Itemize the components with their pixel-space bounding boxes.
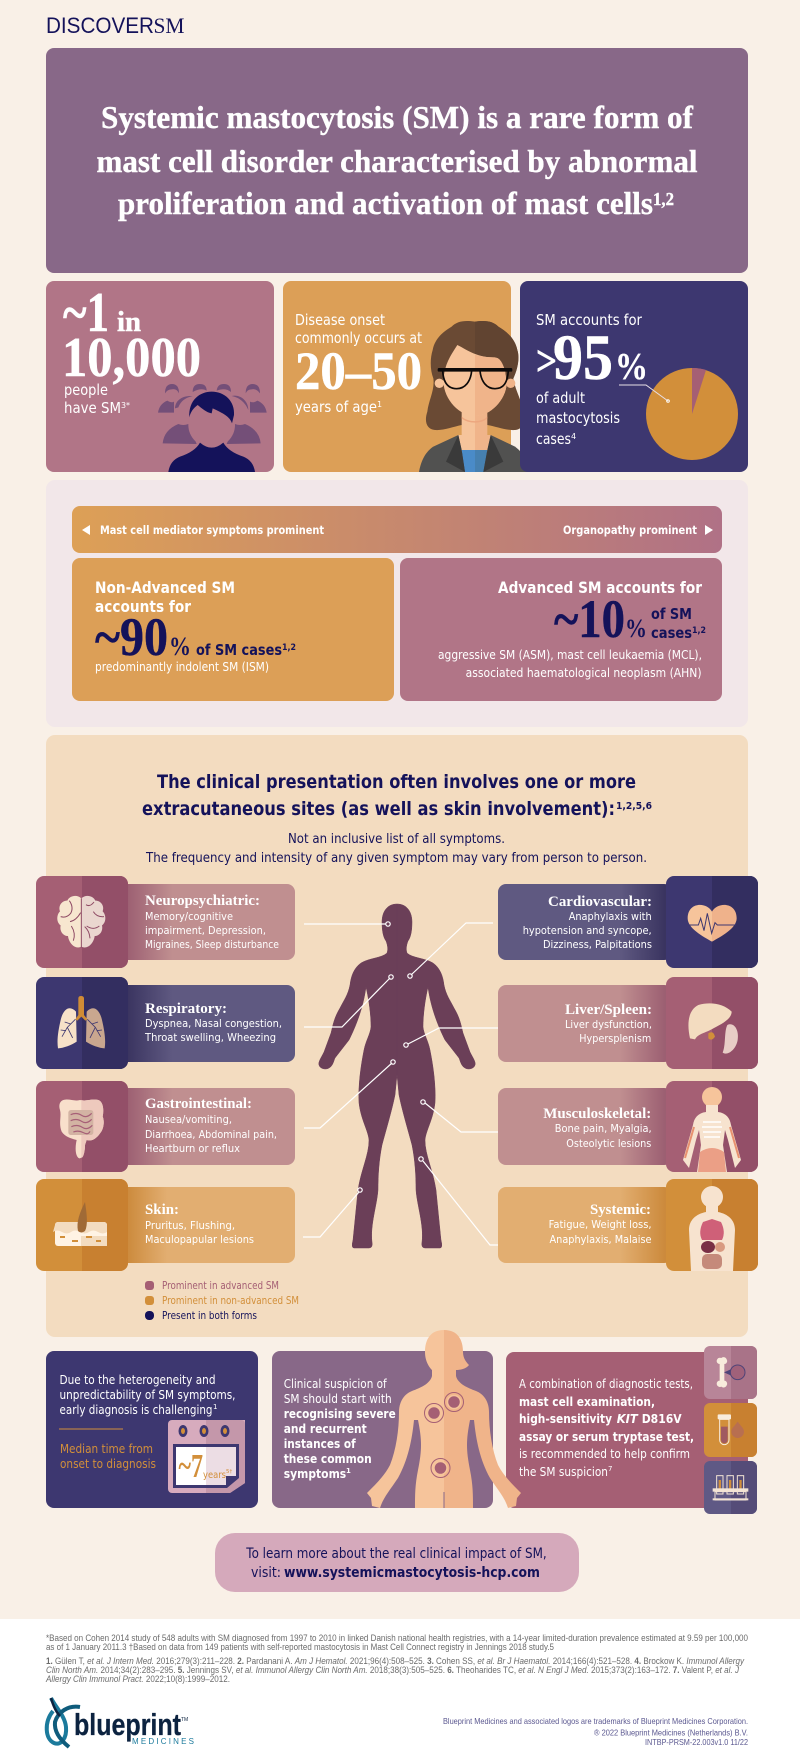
icon: blood sample tube [704, 1403, 757, 1457]
panel: SM subtypes [46, 480, 748, 727]
text: respiratory symptoms: Dyspnea, Nasal congestion, [145, 1017, 282, 1030]
text: >95% of adult mastocytosis cases: 4 [571, 432, 576, 441]
text: gastrointestinal symptoms: Gastrointestinal: [145, 1096, 252, 1112]
text: disease onset: Disease onset [295, 311, 385, 329]
panel: disease onset stat card [283, 281, 529, 472]
legend: Present in both forms [162, 1310, 257, 1322]
card: non-advanced SM: of SM cases [196, 641, 282, 659]
symptom panel: gastrointestinal [36, 1081, 295, 1172]
text: disease onset: 1 [377, 400, 382, 409]
logo: Blueprint Medicines: blueprint [74, 1707, 181, 1742]
icon: figure with internal organs [689, 1186, 735, 1271]
text: disclaimer: The frequency and intensity of any given symptom may vary from person to person. [145, 851, 647, 866]
symptom panel: skin [36, 1179, 295, 1271]
text: cardiovascular symptoms: hypotension and syncope, [523, 924, 652, 937]
footnotes and references [45, 1633, 748, 1684]
text: early diagnosis is challenging: unpredictability of SM symptoms, [60, 1387, 236, 1402]
icon: heart with ECG [688, 905, 737, 942]
text: systemic symptoms: Anaphylaxis, Malaise [550, 1233, 652, 1246]
logo: Blueprint Medicines: TM [181, 1717, 188, 1723]
text: neuropsychiatric symptoms: Migraines, Sleep disturbance [145, 938, 279, 951]
text: median time from onset to diagnosis: Median time from [60, 1441, 153, 1456]
panel: SM share stat card [520, 281, 748, 472]
icon: brain [57, 896, 105, 948]
icon: lungs [58, 996, 105, 1048]
heading: clinical presentation: The clinical presentation often involves one or more [157, 771, 636, 793]
text: liver and spleen symptoms: Liver/Spleen: [565, 1002, 652, 1018]
card: non-advanced SM [72, 558, 394, 701]
text: >95% of adult mastocytosis cases: SM accounts for [536, 311, 643, 329]
legend [145, 1280, 299, 1322]
text: diagnostic tests: is recommended to help confirm [519, 1446, 690, 1461]
legal text: ® 2022 Blueprint Medicines (Netherlands) B.V. [594, 1728, 748, 1738]
panel: diagnostic challenge [46, 1351, 258, 1508]
symptom panel: musculoskeletal [498, 1081, 758, 1172]
text: clinical suspicion: Clinical suspicion of [284, 1376, 387, 1391]
text: early diagnosis is challenging: Due to the heterogeneity and [60, 1372, 216, 1387]
text: clinical suspicion: 1 [346, 1467, 351, 1475]
label: people have SM: have SM [64, 399, 121, 417]
heading: definition of systemic mastocytosis: mast cell disorder characterised by abnormal [96, 143, 698, 179]
text: median time from onset to diagnosis [60, 1441, 156, 1471]
card: non-advanced SM: accounts for [95, 597, 191, 616]
card: advanced SM: ~10 [554, 589, 625, 649]
text: respiratory symptoms: Respiratory: [145, 1001, 227, 1017]
text: disease onset [295, 311, 422, 416]
card: advanced SM: aggressive SM (ASM), mast cell leukaemia (MCL), [438, 648, 702, 662]
icon: calendar showing ~7 years: years [203, 1470, 226, 1481]
text: diagnostic tests: the SM suspicion [519, 1464, 608, 1479]
text: >95% of adult mastocytosis cases: > [536, 339, 557, 385]
text: neuropsychiatric symptoms [145, 893, 279, 951]
text: systemic symptoms [549, 1202, 652, 1246]
text: >95% of adult mastocytosis cases: % [615, 346, 648, 388]
card: non-advanced SM: ~90 [95, 607, 168, 667]
icon: woman with glasses [419, 321, 529, 472]
text: systemic symptoms: Fatigue, Weight loss, [549, 1218, 652, 1231]
text: musculoskeletal symptoms [543, 1106, 652, 1150]
card: advanced SM: 1,2 [692, 626, 706, 636]
panel: clinical presentation [36, 735, 758, 1337]
card: non-advanced SM: predominantly indolent SM (ISM) [95, 660, 269, 674]
symptom panel: systemic [498, 1179, 758, 1271]
text: respiratory symptoms [144, 1001, 282, 1044]
logo: DISCOVERSM: DISCOVER [46, 13, 154, 38]
text: >95% of adult mastocytosis cases: of adult [536, 389, 585, 407]
text: cardiovascular symptoms: Anaphylaxis with [569, 910, 652, 923]
card: advanced SM: associated haematological neoplasm (AHN) [466, 666, 702, 680]
stat: ~1 in 10,000: in [117, 306, 141, 338]
text: gastrointestinal symptoms: Nausea/vomiting, [145, 1113, 232, 1126]
footnotes and references: Clin North Am. 2014;34(2):283–295. 5. Jennings SV, et al. Immunol Allergy Clin North Am. 2018;38(3):505–525. 6. Theoharides TC, et al. N Engl J Med. 2015;373(2):163–172. 7. Valent P, et al. J [46, 1665, 740, 1675]
legend: Prominent in advanced SM [162, 1280, 279, 1292]
text: >95% of adult mastocytosis cases [536, 311, 648, 448]
text: clinical suspicion: symptoms [284, 1466, 346, 1481]
text: liver and spleen symptoms: Liver dysfunction, [565, 1018, 652, 1031]
card: advanced SM: Advanced SM accounts for [498, 578, 702, 597]
text: early diagnosis is challenging [60, 1372, 236, 1417]
callout: website link: To learn more about the real clinical impact of SM, [245, 1546, 547, 1562]
heading: clinical presentation [142, 771, 652, 820]
text: gastrointestinal symptoms: Diarrhoea, Abdominal pain, [145, 1128, 277, 1141]
panel: clinical suspicion [272, 1351, 493, 1508]
text: musculoskeletal symptoms: Musculoskeletal: [543, 1106, 651, 1122]
text: diagnostic tests: mast cell examination, [519, 1394, 655, 1409]
symptom panel: respiratory [36, 977, 295, 1069]
text: disease onset: 20–50 [295, 341, 422, 401]
stat: ~1 in 10,000: 10,000 [62, 327, 201, 389]
card: advanced SM [400, 558, 722, 701]
icon: bone marrow [704, 1346, 757, 1399]
symptom panel: neuropsychiatric [36, 876, 295, 968]
text: clinical suspicion: these common [284, 1451, 372, 1466]
text: musculoskeletal symptoms: Osteolytic lesions [566, 1137, 652, 1150]
footnotes and references: as of 1 January 2011.3 †Based on data from 149 patients with self-reported mastocytosis in Mast Cell Connect registry in Jennings 2018 study.5 [46, 1642, 554, 1652]
text: diagnostic tests: assay or serum tryptase test, [519, 1429, 694, 1444]
heading: clinical presentation: 1,2,5,6 [616, 801, 652, 812]
gradient bar: symptom spectrum: Mast cell mediator symptoms prominent [100, 523, 324, 537]
text: early diagnosis is challenging: early diagnosis is challenging [60, 1402, 212, 1417]
text: skin symptoms: Skin: [145, 1202, 179, 1218]
icon: calendar showing ~7 years [168, 1420, 245, 1493]
text: diagnostic tests: KIT [617, 1411, 639, 1426]
icon: skin layers with hair [53, 1202, 107, 1246]
text: >95% of adult mastocytosis cases: mastocytosis [536, 409, 620, 427]
text: diagnostic tests: D816V [642, 1411, 682, 1426]
label: people have SM: 3* [121, 401, 130, 410]
footnotes and references: *Based on Cohen 2014 study of 548 adults with SM diagnosed from 1997 to 2010 in linked Danish national health registries, with a 14-year limited-duration prevalence estimated at 9.59 per 100,000 [46, 1633, 748, 1643]
text: cardiovascular symptoms: Cardiovascular: [548, 894, 652, 910]
text: gastrointestinal symptoms [145, 1096, 277, 1155]
text: skin symptoms: Pruritus, Flushing, [145, 1219, 235, 1232]
card: non-advanced SM: 1,2 [282, 643, 296, 653]
stat: ~1 in 10,000 [62, 282, 201, 389]
card: advanced SM: of SM [651, 605, 692, 623]
text: neuropsychiatric symptoms: impairment, Depression, [145, 924, 266, 937]
text: neuropsychiatric symptoms: Neuropsychiatric: [145, 893, 260, 909]
text: neuropsychiatric symptoms: Memory/cognitive [145, 910, 233, 923]
text: >95% of adult mastocytosis cases: cases [536, 430, 571, 448]
callout: website link: www.systemicmastocytosis-hcp.com [284, 1565, 540, 1581]
text: clinical suspicion: SM should start with [284, 1391, 392, 1406]
gradient bar: symptom spectrum [72, 506, 722, 553]
text: diagnostic tests: high-sensitivity [519, 1411, 612, 1426]
legend: Prominent in non-advanced SM [162, 1295, 299, 1307]
legal text: Blueprint Medicines and associated logos are trademarks of Blueprint Medicines Corporation. [443, 1716, 748, 1726]
text: clinical suspicion [284, 1376, 396, 1481]
text: musculoskeletal symptoms: Bone pain, Myalgia, [555, 1122, 652, 1135]
panel: prevalence stat card [46, 281, 274, 472]
text: >95% of adult mastocytosis cases: 95 [553, 322, 613, 394]
label: people have SM: people [64, 381, 108, 399]
heading: clinical presentation: extracutaneous sites (as well as skin involvement): [142, 798, 615, 820]
heading: definition of systemic mastocytosis [96, 99, 698, 221]
gradient bar: symptom spectrum: Organopathy prominent [563, 523, 697, 537]
footnotes and references: Allergy Clin Immunol Pract. 2022;10(8):1999–2012. [45, 1674, 230, 1684]
text: early diagnosis is challenging: 1 [213, 1403, 217, 1411]
text: diagnostic tests: A combination of diagnostic tests, [519, 1376, 693, 1391]
heading: definition of systemic mastocytosis: proliferation and activation of mast cells [118, 185, 653, 221]
text: cardiovascular symptoms [523, 894, 652, 951]
text: clinical suspicion: and recurrent [284, 1421, 367, 1436]
text: disclaimer [145, 832, 647, 866]
stat: ~1 in 10,000: ~1 [63, 282, 109, 344]
text: liver and spleen symptoms: Hypersplenism [579, 1032, 651, 1045]
icon: helix [47, 1698, 80, 1747]
callout: website link [215, 1533, 579, 1592]
icon: calendar showing ~7 years: ~7 [178, 1448, 203, 1485]
text: liver and spleen symptoms [565, 1002, 652, 1045]
heading: definition of systemic mastocytosis: 1,2 [653, 189, 674, 209]
text: diagnostic tests [519, 1376, 694, 1479]
icon: crowd of people [158, 384, 267, 472]
card: non-advanced SM: % [169, 632, 191, 661]
text: skin symptoms: Maculopapular lesions [145, 1233, 254, 1246]
text: disease onset: years of age [295, 398, 377, 416]
footnotes and references: 1. Gülen T, et al. J Intern Med. 2016;279(3):211–228. 2. Pardanani A. Am J Hematol. 2021;96(4):508–525. 3. Cohen SS, et al. Br J Haematol. 2014;166(4):521–528. 4. Brockow K. Immunol Allergy [46, 1656, 745, 1666]
logo: DISCOVERSM: SM [154, 13, 184, 38]
text: clinical suspicion: instances of [284, 1436, 356, 1451]
connector lines from symptom panels to body [303, 922, 502, 1245]
card: non-advanced SM: Non-Advanced SM [95, 578, 235, 597]
text: skin symptoms [145, 1202, 254, 1246]
icon: liver and spleen [688, 1003, 738, 1054]
text: clinical suspicion: recognising severe [284, 1406, 396, 1421]
illustration: human body silhouette [319, 904, 475, 1248]
card: advanced SM: cases [651, 624, 692, 642]
card: advanced SM: % [625, 614, 647, 643]
text: median time from onset to diagnosis: onset to diagnosis [60, 1456, 156, 1471]
logo: Blueprint Medicines [47, 1698, 194, 1747]
label: people have SM [64, 381, 130, 417]
icon: test tube rack [704, 1461, 757, 1514]
legal text [443, 1716, 748, 1747]
text: diagnostic tests: 7 [608, 1465, 612, 1473]
heading: definition of systemic mastocytosis: Systemic mastocytosis (SM) is a rare form of [101, 99, 693, 135]
icon: calendar showing ~7 years: 5† [226, 1469, 232, 1475]
icon: intestines [59, 1100, 104, 1158]
symptom panel: cardiovascular [498, 876, 758, 968]
text: disclaimer: Not an inclusive list of all symptoms. [288, 832, 505, 847]
text: disease onset: commonly occurs at [295, 329, 422, 347]
text: gastrointestinal symptoms: Heartburn or reflux [145, 1142, 240, 1155]
text: cardiovascular symptoms: Dizziness, Palpitations [543, 938, 652, 951]
panel: title banner [46, 48, 748, 273]
symptom panel: liver and spleen [498, 977, 758, 1069]
chart: pie of SM share [619, 368, 738, 460]
illustration: woman with symptom markers [367, 1330, 521, 1508]
icon: skeletal figure [683, 1087, 741, 1172]
text: respiratory symptoms: Throat swelling, Wheezing [144, 1031, 276, 1044]
callout: website link: visit: [251, 1565, 281, 1581]
logo: Blueprint Medicines: MEDICINES [132, 1737, 194, 1746]
legal text: INTBP-PRSM-22.003v1.0 11/22 [645, 1737, 748, 1747]
panel: diagnostic tests [506, 1346, 757, 1514]
text: systemic symptoms: Systemic: [590, 1202, 651, 1218]
